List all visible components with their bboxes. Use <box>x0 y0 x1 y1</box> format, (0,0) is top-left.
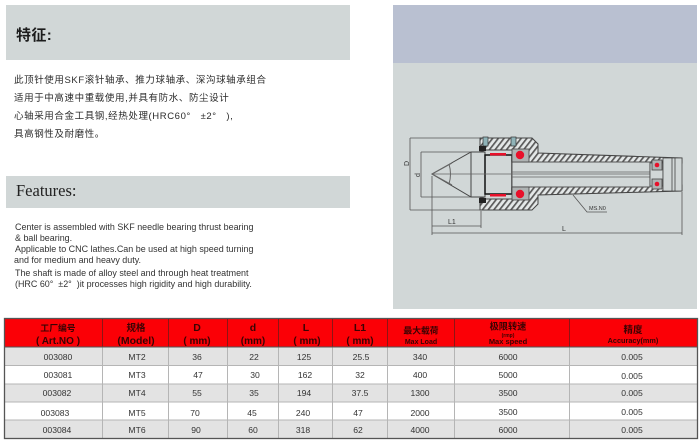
table values: 0.005 <box>621 352 643 362</box>
panel: English features heading <box>6 176 350 208</box>
table values: 194 <box>297 388 311 398</box>
table values: 003081 <box>44 370 73 380</box>
ball bearings <box>512 149 529 200</box>
dimension lines <box>410 138 682 235</box>
table values: 60 <box>248 425 258 435</box>
text block: English description: & ball bearing. <box>15 233 72 243</box>
header labels: 极限转速 <box>490 320 526 332</box>
table rows <box>4 347 698 438</box>
text block: English description: Center is assembled with SKF needle bearing thrust bearing <box>15 222 253 232</box>
text block: English description: and for medium and heavy duty. <box>14 255 141 265</box>
header labels: Max speed <box>489 337 528 346</box>
table header <box>4 318 698 347</box>
seal rings <box>479 146 486 203</box>
table values: 003082 <box>43 388 72 398</box>
table values: MT3 <box>128 370 146 380</box>
table values: 55 <box>192 388 202 398</box>
header labels: (Model) <box>117 335 155 347</box>
table values: 47 <box>353 408 363 418</box>
header labels: 精度 <box>623 324 643 336</box>
table: specifications <box>4 318 698 438</box>
table values: MT2 <box>128 352 146 362</box>
table values: MT6 <box>128 425 146 435</box>
table values: MT4 <box>128 388 146 398</box>
text block: English description <box>14 222 254 289</box>
table values: 0.005 <box>621 388 643 398</box>
table values: 35 <box>249 388 259 398</box>
tail bearing <box>650 158 682 191</box>
panel: Chinese features heading <box>6 5 350 60</box>
hatched housing and shank <box>480 138 682 210</box>
table values: 3500 <box>498 388 518 398</box>
table values: 6000 <box>498 352 518 362</box>
header labels: 规格 <box>126 322 146 334</box>
table values: 70 <box>190 408 200 418</box>
panel background <box>393 5 697 309</box>
table values: 003083 <box>41 408 70 418</box>
header labels: (rmp) <box>502 333 515 339</box>
heading: English features: Features: <box>16 181 76 200</box>
table values: MT5 <box>128 408 146 418</box>
screws <box>483 137 516 146</box>
table values: 0.005 <box>621 407 643 417</box>
table values: 30 <box>250 370 260 380</box>
labels on drawing <box>404 161 606 233</box>
table values: 162 <box>298 370 312 380</box>
table values: 400 <box>413 370 427 380</box>
header labels: 工厂编号 <box>40 322 76 333</box>
text block: English description: The shaft is made of alloy steel and through heat treatment <box>15 268 249 278</box>
text block: Chinese description: 具高钢性及耐磨性。 <box>14 129 105 140</box>
table values: 25.5 <box>353 352 370 362</box>
text block: Chinese description: 心轴采用合金工具钢,经热处理(HRC60° ±2° ), <box>14 111 233 122</box>
table values: 2000 <box>410 408 430 418</box>
labels on drawing: D <box>404 161 411 166</box>
table values: 318 <box>296 425 310 435</box>
table values: 003080 <box>44 352 73 362</box>
text block: Chinese description <box>14 74 267 140</box>
cone tip and spindle <box>432 152 672 197</box>
table values: 5000 <box>498 370 518 380</box>
header labels: ( mm) <box>293 336 321 347</box>
table values: 4000 <box>410 425 430 435</box>
header labels: ( mm) <box>346 336 374 347</box>
table values: 45 <box>247 408 257 418</box>
header labels: (mm) <box>241 336 265 347</box>
header labels: Max Load <box>405 339 437 346</box>
labels on drawing: d <box>415 173 422 177</box>
table values: 90 <box>191 425 201 435</box>
header labels: ( Art.NO ) <box>36 336 80 347</box>
table values: 3500 <box>498 407 518 417</box>
header labels: d <box>250 322 256 334</box>
table values: 6000 <box>498 425 518 435</box>
text block: Chinese description: 适用于中高速中重载使用,并具有防水、防尘设计 <box>14 93 229 104</box>
table values: 32 <box>355 370 365 380</box>
header labels: ( mm) <box>183 336 211 347</box>
header labels: D <box>193 322 201 334</box>
labels on drawing: MS.N0 <box>589 206 606 212</box>
table values: 37.5 <box>352 388 369 398</box>
labels on drawing: L <box>562 226 566 233</box>
table values: 0.005 <box>621 371 643 381</box>
text block: English description: (HRC 60° ±2° )it processes high rigidity and high durability. <box>15 279 252 289</box>
table values: 1300 <box>410 388 430 398</box>
table values: 125 <box>297 352 311 362</box>
table values: 22 <box>249 352 259 362</box>
table values <box>41 352 643 435</box>
table values: 240 <box>296 408 310 418</box>
needle bearing rollers <box>490 153 506 196</box>
table values: 0.005 <box>621 425 643 435</box>
table values: 003084 <box>43 425 72 435</box>
text block: Chinese description: 此顶针使用SKF滚针轴承、推力球轴承、深沟球轴承组合 <box>14 75 267 86</box>
labels on drawing: L1 <box>448 219 456 226</box>
table values: 36 <box>192 352 202 362</box>
header labels: L <box>303 322 310 334</box>
heading: Chinese features: 特征: <box>16 27 52 44</box>
table values: 340 <box>413 352 427 362</box>
header labels: L1 <box>354 322 366 334</box>
header labels: Accuracy(mm) <box>608 336 659 345</box>
drawing: live center cross-section <box>410 137 682 235</box>
text block: English description: Applicable to CNC lathes.Can be used at high speed turning <box>15 244 254 254</box>
table values: 62 <box>353 425 363 435</box>
header labels: 最大载荷 <box>403 324 439 336</box>
table grid <box>4 318 698 438</box>
header labels <box>36 320 659 347</box>
table values: 47 <box>193 370 203 380</box>
